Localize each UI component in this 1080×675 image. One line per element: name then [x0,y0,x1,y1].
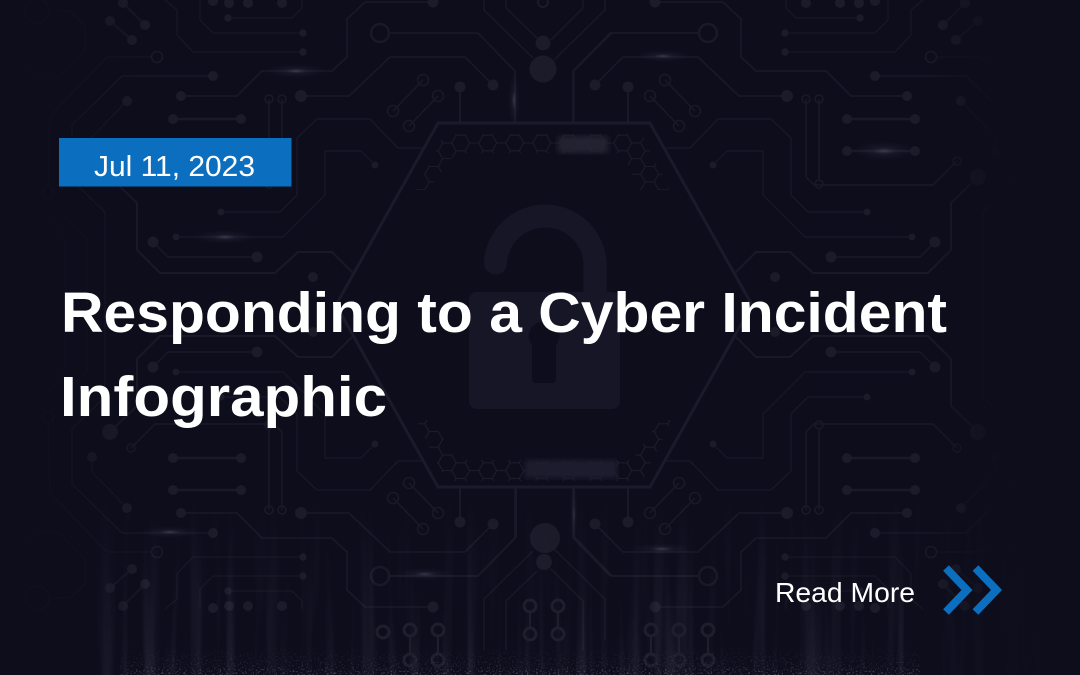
edge fade left [0,0,150,675]
bottom light streaks and rings [104,598,903,675]
date text: Jul 11, 2023 [94,151,255,183]
highlight band bottom [525,460,617,478]
hexagon mesh bottom [416,420,672,481]
padlock body [469,292,620,409]
hexagon frame [336,123,752,487]
light glows [140,50,916,580]
title: Responding to a Cyber Incident [61,281,947,345]
date badge [59,138,292,186]
title [60,281,947,429]
edge fade right [930,0,1080,675]
read more link: Read More [775,577,915,608]
title: Infographic [60,365,387,429]
icon: double chevron arrow [946,568,996,612]
icon: open padlock [469,216,620,409]
bottom particle glitter [120,654,920,675]
highlight band top [558,136,608,153]
hexagon mesh top [416,134,670,190]
